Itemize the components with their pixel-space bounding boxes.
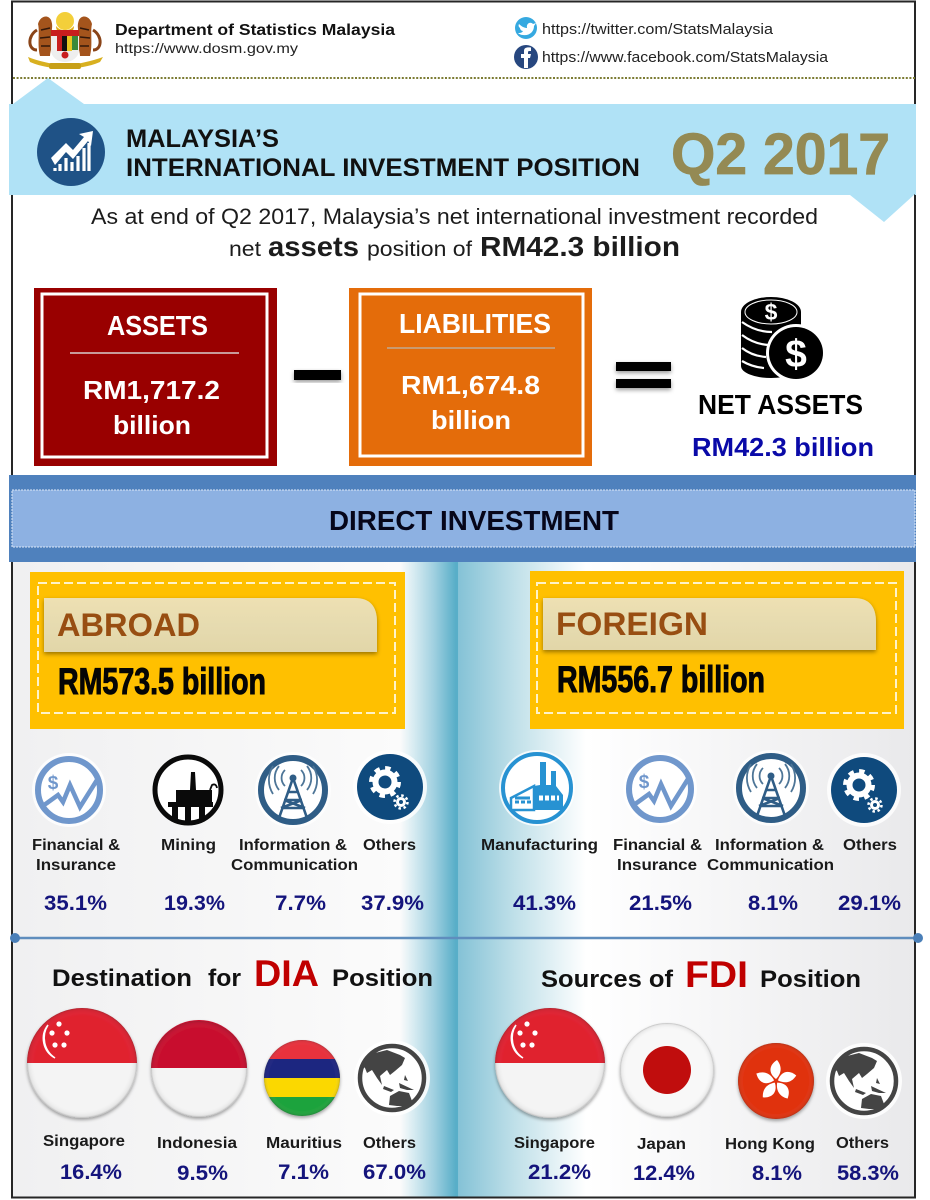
panel: abroad	[30, 572, 405, 729]
icon: manufacturing	[499, 750, 575, 826]
icon: others	[827, 753, 901, 827]
period label: Q2 2017	[671, 122, 890, 187]
panel: lower left background gradient	[13, 562, 458, 1197]
label: mining: Mining	[161, 837, 216, 854]
icon: others globe	[826, 1043, 902, 1119]
assets heading: ASSETS	[107, 310, 208, 341]
net assets value: RM42.3 billion	[692, 432, 874, 462]
banner ribbon shape	[9, 78, 916, 222]
title line 1: MALAYSIA’S	[126, 125, 279, 153]
header: social links	[514, 17, 829, 69]
heading: destination for DIA position: Position	[332, 965, 433, 992]
liabilities heading: LIABILITIES	[399, 308, 551, 339]
heading: destination for DIA position: DIA	[254, 953, 319, 994]
title line 2: INTERNATIONAL INVESTMENT POSITION	[126, 154, 640, 182]
section banner: direct investment	[9, 475, 916, 562]
icon: financial	[623, 752, 697, 826]
label: manufacturing: Manufacturing	[481, 837, 598, 854]
liabilities value: RM1,674.8	[401, 370, 540, 400]
summary line 1: As at end of Q2 2017, Malaysia’s net international investment recorded	[91, 204, 818, 229]
flag: Mauritius	[264, 1040, 340, 1116]
icon: coin stack: $	[765, 299, 778, 325]
assets unit: billion	[113, 410, 191, 440]
label: Hong Kong: Hong Kong	[725, 1136, 815, 1153]
value: others: 29.1%	[838, 892, 901, 915]
flag: Japan	[620, 1023, 714, 1117]
label: financial: Financial &	[613, 837, 702, 854]
value: financial: 21.5%	[629, 892, 692, 915]
icon: information and communication	[733, 750, 809, 826]
facebook link: https://www.facebook.com/StatsMalaysia	[542, 50, 829, 66]
label: Singapore: Singapore	[514, 1135, 595, 1152]
heading: sources of FDI position: FDI	[685, 954, 748, 995]
heading: destination for DIA position: for	[208, 965, 241, 992]
organisation website: https://www.dosm.gov.my	[115, 40, 298, 56]
label: insurance: Insurance	[617, 857, 697, 874]
net assets label: NET ASSETS	[698, 389, 863, 420]
icon: others	[353, 750, 427, 824]
foreign value: RM556.7 billion	[557, 659, 765, 700]
liabilities unit: billion	[431, 405, 511, 435]
twitter link: https://twitter.com/StatsMalaysia	[542, 22, 774, 38]
abroad value: RM573.5 billion	[58, 661, 266, 702]
summary sentence	[91, 204, 818, 262]
icon: others globe	[354, 1040, 430, 1116]
value: financial: 35.1%	[44, 892, 107, 915]
heading: sources of FDI position: Position	[760, 966, 861, 993]
label: others: Others	[843, 837, 897, 854]
heading: destination for DIA position	[52, 953, 433, 994]
destination countries	[27, 1008, 430, 1185]
label: Singapore: Singapore	[43, 1133, 125, 1150]
equals sign	[616, 362, 671, 388]
icon: Malaysian coat of arms	[28, 12, 103, 69]
label: information: Information &	[239, 837, 347, 854]
value: Others: 67.0%	[363, 1161, 426, 1184]
organisation name: Department of Statistics Malaysia	[115, 22, 395, 39]
label: Mauritius: Mauritius	[266, 1135, 342, 1152]
icon: coin stack	[741, 297, 826, 382]
icon: rising chart	[37, 118, 105, 186]
label: information: Information &	[715, 837, 824, 854]
abroad heading: ABROAD	[57, 607, 200, 643]
icon: financial	[32, 753, 106, 827]
source countries	[495, 1008, 902, 1185]
label: Indonesia: Indonesia	[157, 1135, 237, 1152]
icon: mining	[155, 757, 221, 823]
panel: lower right background gradient	[458, 562, 915, 1197]
label: Japan: Japan	[637, 1136, 686, 1153]
value: manufacturing: 41.3%	[513, 892, 576, 915]
panel: foreign	[530, 571, 904, 729]
header: organisation	[28, 12, 395, 69]
panel: assets	[34, 288, 277, 466]
summary line 2: position of	[367, 238, 472, 261]
summary line 2: assets	[268, 231, 359, 262]
icon: information and communication	[255, 752, 331, 828]
section heading: DIRECT INVESTMENT	[329, 505, 619, 536]
flag: Singapore	[27, 1008, 137, 1118]
abroad sectors	[32, 750, 427, 915]
label: communication: Communication	[707, 857, 834, 874]
label: communication: Communication	[231, 857, 358, 874]
assets value: RM1,717.2	[83, 375, 220, 405]
flag: Singapore	[495, 1008, 605, 1118]
icon: coin stack: $	[785, 333, 807, 376]
heading: destination for DIA position: Destination	[52, 965, 192, 992]
value: others: 37.9%	[361, 892, 424, 915]
summary line 2: RM42.3 billion	[480, 231, 680, 262]
value: Indonesia: 9.5%	[177, 1162, 228, 1185]
heading: sources of FDI position: Sources of	[541, 966, 674, 993]
value: information: 8.1%	[748, 892, 798, 915]
minus sign	[294, 370, 341, 380]
value: Singapore: 16.4%	[60, 1161, 122, 1184]
value: mining: 19.3%	[164, 892, 225, 915]
icon: facebook	[514, 45, 538, 69]
flag: Hong Kong	[738, 1043, 814, 1119]
label: Others: Others	[363, 1135, 416, 1152]
value: Mauritius: 7.1%	[278, 1161, 329, 1184]
value: information: 7.7%	[275, 892, 326, 915]
label: Others: Others	[836, 1135, 889, 1152]
heading: sources of FDI position	[541, 954, 861, 995]
icon: twitter	[515, 17, 537, 39]
title banner	[9, 78, 916, 222]
label: financial and insurance: Financial &	[32, 837, 120, 854]
panel: liabilities	[349, 288, 592, 466]
value: Singapore: 21.2%	[528, 1161, 591, 1184]
net assets result	[692, 297, 874, 462]
foreign heading: FOREIGN	[556, 606, 708, 642]
label: others: Others	[363, 837, 416, 854]
value: Japan: 12.4%	[633, 1162, 695, 1185]
value: Others: 58.3%	[837, 1162, 899, 1185]
flag: Indonesia	[151, 1020, 247, 1117]
label: insurance: Insurance	[36, 857, 116, 874]
foreign sectors	[481, 750, 901, 915]
summary line 2: net	[229, 238, 261, 261]
horizontal divider with end dots	[10, 933, 923, 943]
value: Hong Kong: 8.1%	[752, 1162, 802, 1185]
header dotted divider	[13, 77, 915, 79]
